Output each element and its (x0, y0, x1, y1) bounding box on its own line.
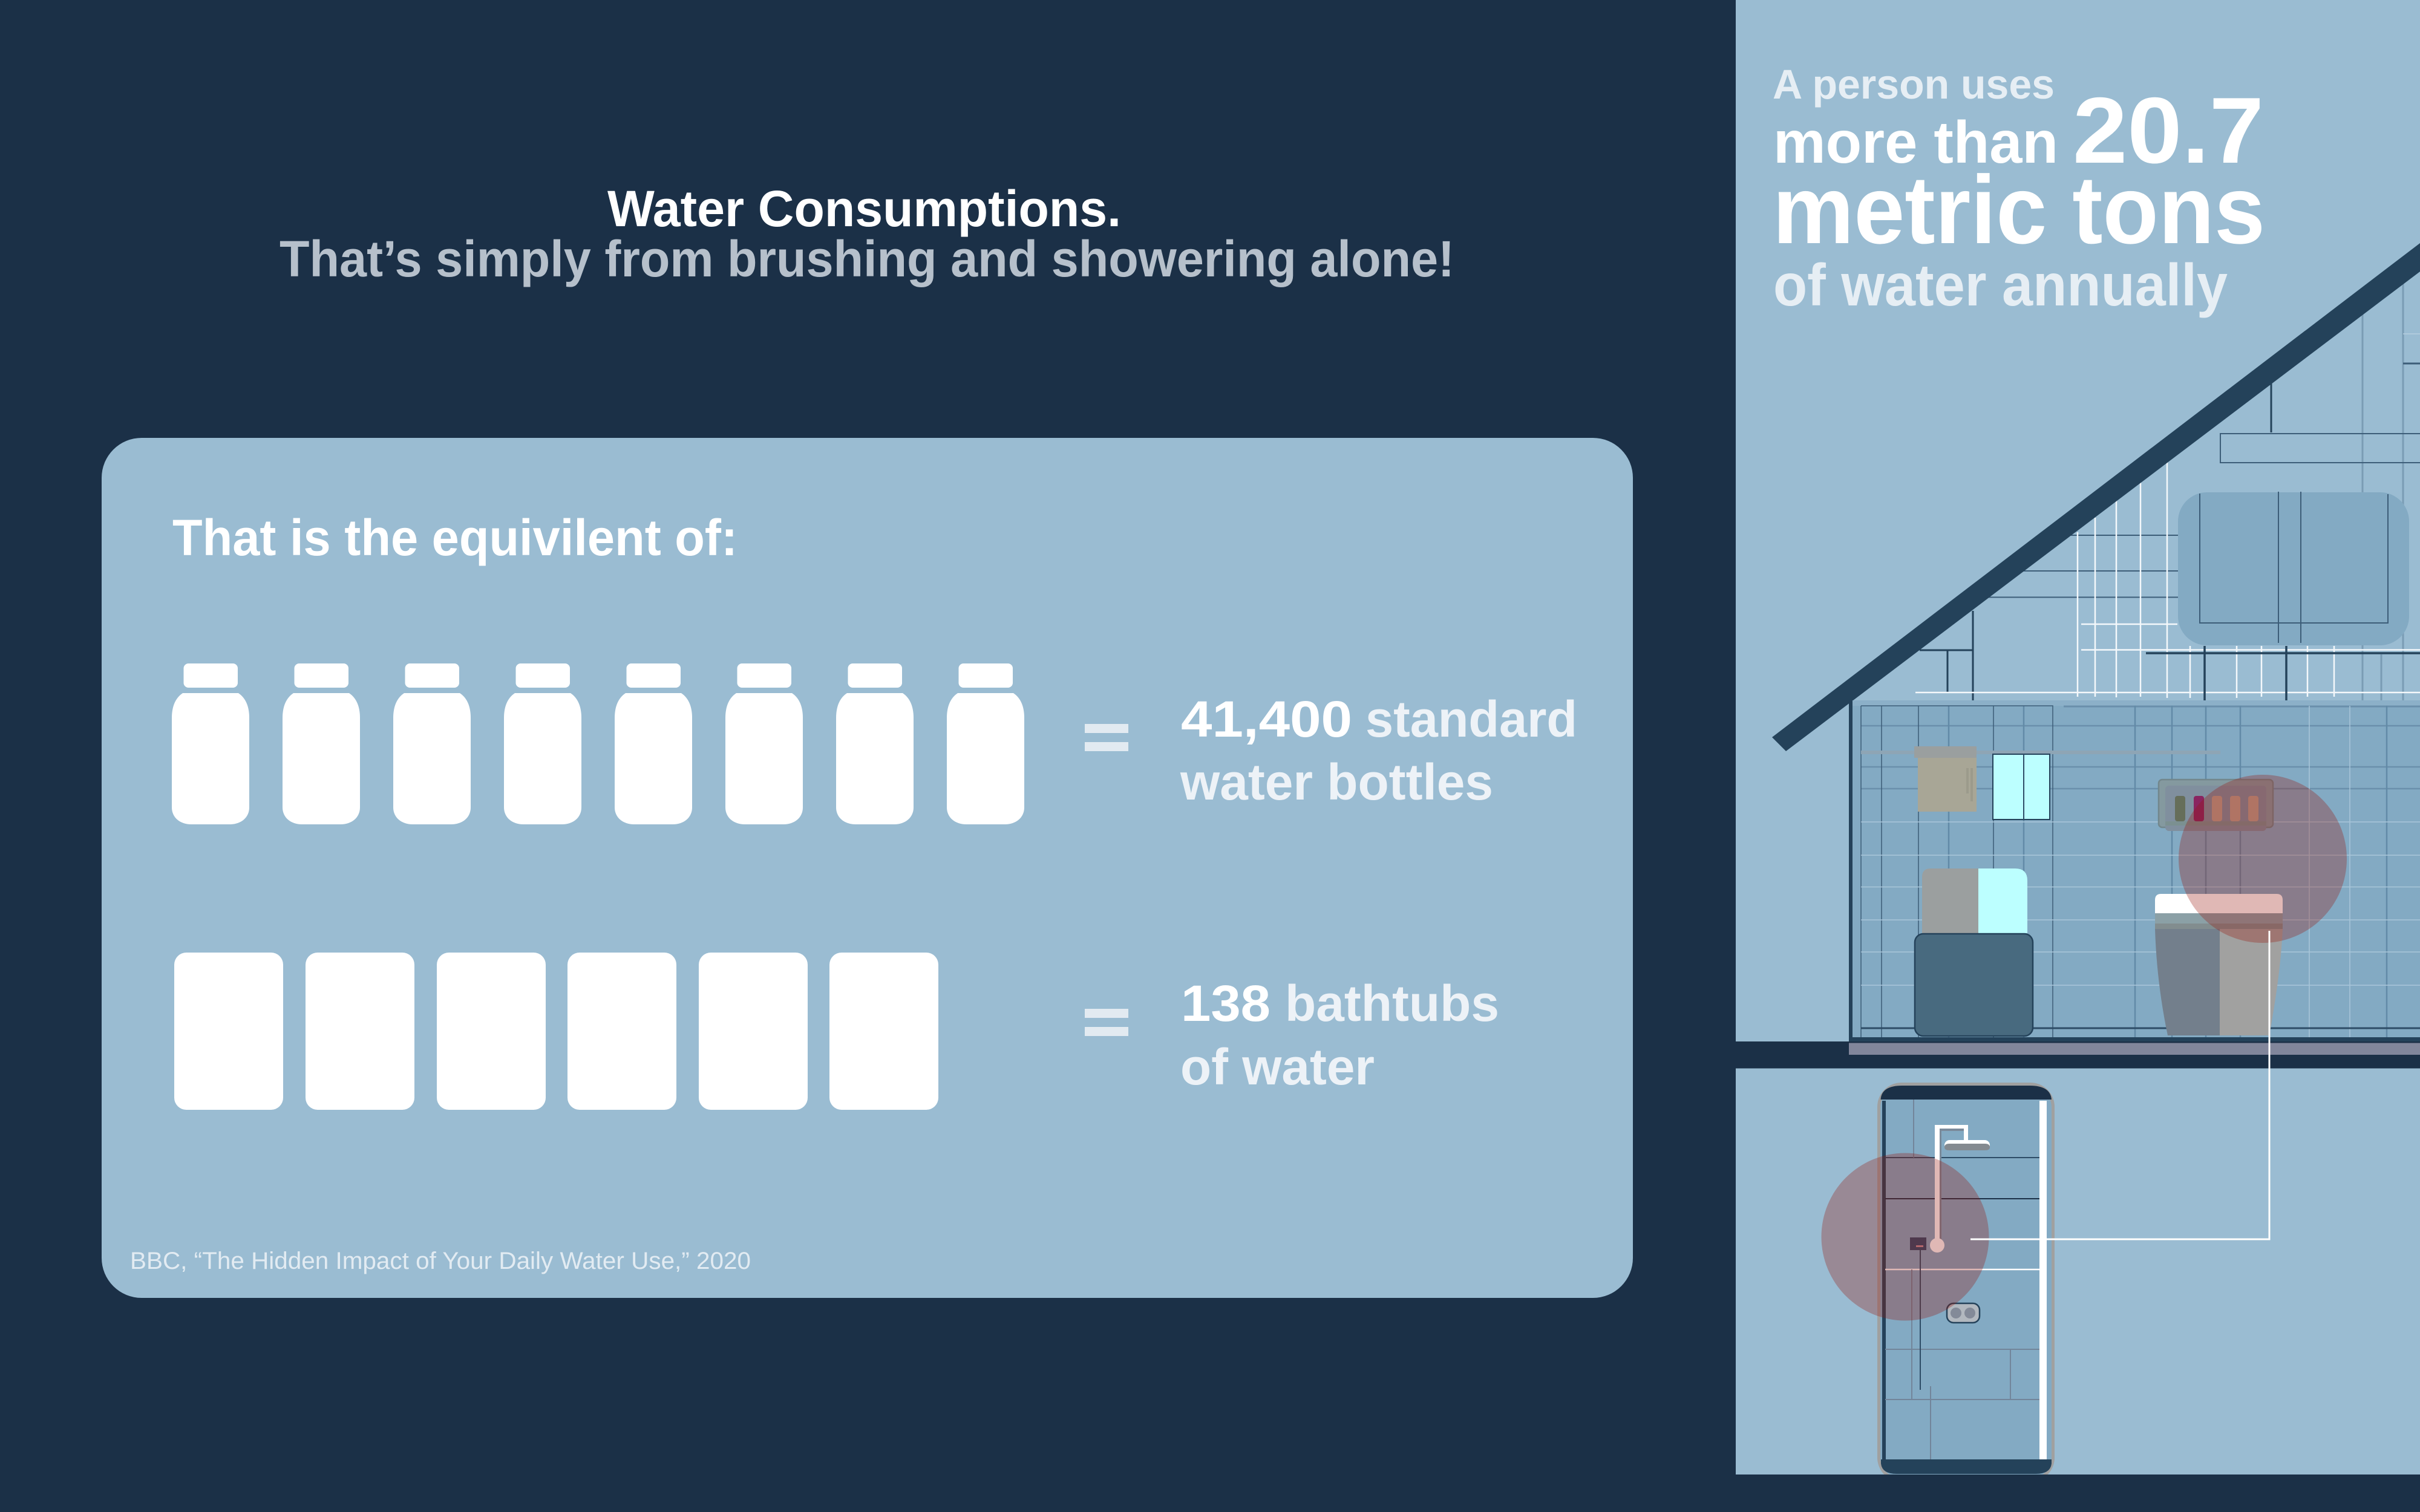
panel: equivalents card (102, 438, 1633, 1298)
attic window (2178, 492, 2409, 645)
highlight circle: toilet area (2179, 775, 2347, 943)
wall tile grid (1861, 706, 2420, 1038)
headline: annual water use (1773, 61, 2265, 318)
attic framing lines (1915, 280, 2420, 705)
title: That’s simply from brushing and showering alone! (280, 230, 1454, 287)
room floor (1849, 1037, 2420, 1042)
equals sign: bottles (1085, 724, 1128, 751)
panel: house illustration (1736, 0, 2420, 1512)
equals sign: bathtubs (1085, 1009, 1128, 1036)
headline: annual water use: metric tons (1773, 155, 2265, 264)
headline: annual water use: more than (1773, 109, 2058, 175)
headline: annual water use: of water annually (1773, 252, 2228, 318)
stat: bathtubs: 138 (1181, 975, 1270, 1032)
towel rail and towel (1861, 746, 2220, 812)
shower control box (1910, 1237, 1926, 1250)
base strip covering stall bottom (1736, 1475, 2420, 1512)
title: Water Consumptions. (607, 180, 1121, 237)
title (280, 180, 1454, 287)
source note: BBC, “The Hidden Impact of Your Daily Water Use,” 2020 (130, 1248, 751, 1274)
shower wall lines (1885, 1100, 2041, 1459)
mirror (1993, 754, 2050, 820)
headline: annual water use: A person uses (1773, 61, 2055, 108)
connector line between highlights (1970, 931, 2269, 1239)
stat: water bottles (1180, 691, 1577, 810)
icon row: water bottles (172, 663, 1024, 824)
shower stall (1877, 1083, 2055, 1482)
shower valve (1947, 1303, 1980, 1323)
stat: water bottles: 41,400 (1181, 691, 1352, 748)
stat: bathtubs: of water (1180, 1038, 1375, 1095)
card heading: That is the equivilent of: (172, 509, 737, 566)
stat: bathtubs (1180, 975, 1499, 1095)
stat: water bottles: water bottles (1180, 754, 1493, 810)
highlight circle: shower area (1821, 1153, 1989, 1321)
floor slab (1736, 1041, 2420, 1068)
shower head and pipe (1930, 1125, 1990, 1253)
sink (1915, 868, 2033, 1036)
roof beam (1772, 243, 2420, 751)
stat: water bottles: standard (1365, 691, 1577, 748)
icon row: bathtubs (174, 953, 938, 1110)
bathroom room wall (1849, 700, 2420, 1042)
wall shelf with bottles (2159, 780, 2273, 831)
stat: bathtubs: bathtubs (1285, 975, 1499, 1032)
toilet (2155, 894, 2283, 1035)
headline: annual water use: 20.7 (2073, 78, 2264, 183)
